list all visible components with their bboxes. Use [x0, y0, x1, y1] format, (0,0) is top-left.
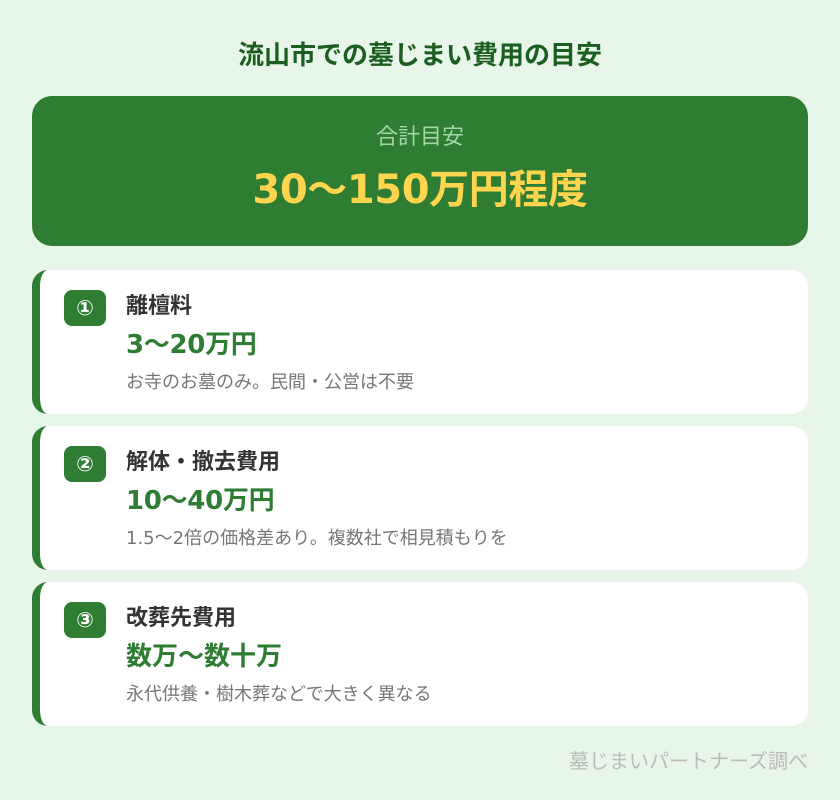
- badge 2: ②: [76, 452, 94, 476]
- badge 2: [64, 446, 106, 482]
- item 1 note: お寺のお墓のみ。民間・公営は不要: [126, 372, 414, 393]
- badge 3: ③: [76, 608, 94, 632]
- item 1 amount: 3～20万円: [126, 330, 256, 360]
- total value: 30～150万円程度: [252, 167, 588, 213]
- item 2 name: 解体・撤去費用: [126, 450, 280, 475]
- panel: item 3: [32, 582, 808, 726]
- badge 1: [64, 290, 106, 326]
- item 1 name: 離檀料: [126, 294, 192, 319]
- item 2 amount: 10～40万円: [126, 486, 274, 516]
- title: 流山市での墓じまい費用の目安: [238, 41, 602, 71]
- badge 3: [64, 602, 106, 638]
- item 3 note: 永代供養・樹木葬などで大きく異なる: [126, 684, 432, 705]
- item 3 name: 改葬先費用: [126, 606, 236, 631]
- item 2 note: 1.5～2倍の価格差あり。複数社で相見積もりを: [126, 528, 508, 549]
- panel: item 2: [32, 426, 808, 570]
- panel: item 1: [32, 270, 808, 414]
- source credit: 墓じまいパートナーズ調べ: [569, 749, 808, 773]
- item 3 amount: 数万～数十万: [126, 642, 282, 672]
- panel: total estimate: [32, 96, 808, 246]
- badge 1: ①: [76, 296, 94, 320]
- total label: 合計目安: [376, 125, 464, 150]
